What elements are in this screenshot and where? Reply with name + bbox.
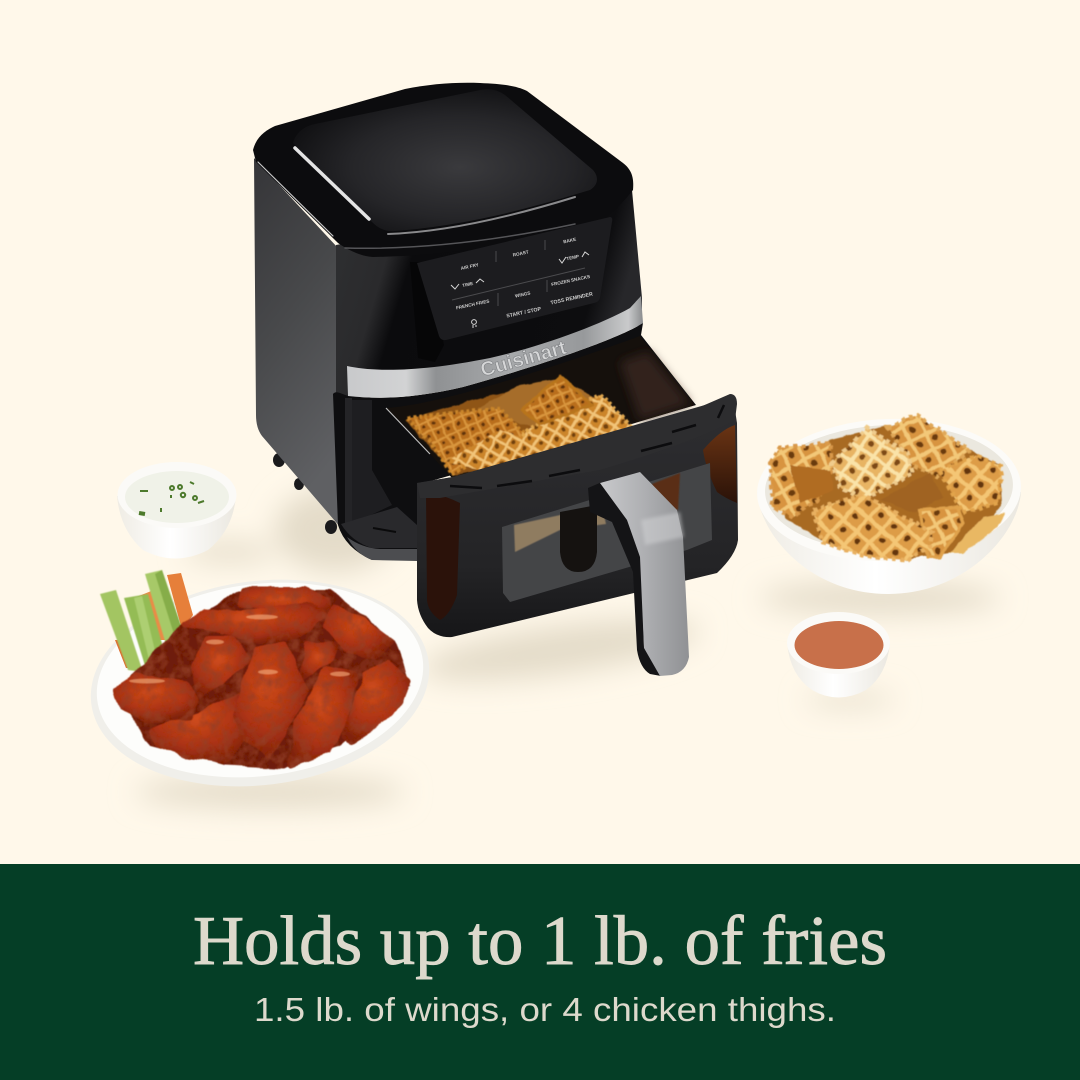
handle dark back	[588, 482, 661, 676]
compartment interior reflection	[352, 400, 392, 524]
bottom banner	[0, 864, 1080, 1080]
rim slots	[450, 405, 724, 488]
wing glaze highlights	[129, 614, 350, 684]
basket back reflection	[620, 352, 690, 420]
panel labels: FRENCH FRIES	[456, 299, 490, 311]
sauce cup	[787, 612, 890, 698]
waffle fries	[770, 415, 1005, 560]
wing mass base	[115, 590, 410, 768]
drawer rim	[417, 394, 737, 498]
reflected fries near handle	[652, 473, 680, 510]
celery sticks	[100, 570, 190, 678]
drawer left tinted window	[426, 492, 460, 620]
handle silver front	[600, 472, 689, 676]
control panel	[417, 217, 612, 340]
basket interior	[386, 336, 695, 478]
chives	[139, 482, 204, 514]
heading: Holds up to 1 lb. of fries	[193, 903, 887, 980]
sauce	[794, 621, 884, 669]
fries bowl	[755, 414, 1023, 594]
front face dark glare	[410, 262, 444, 362]
fries seen through window	[514, 506, 606, 552]
ranch	[125, 471, 229, 523]
drawer front	[417, 397, 738, 637]
fries base	[772, 425, 1002, 560]
cup rim	[787, 612, 890, 674]
fryer left side panel	[254, 158, 341, 528]
wings	[115, 590, 410, 768]
drawer front window	[502, 463, 712, 602]
panel labels: BAKE	[563, 237, 577, 244]
panel labels: WINGS	[515, 290, 531, 299]
panel labels: FROZEN SNACKS	[551, 274, 591, 287]
panel labels	[456, 237, 594, 320]
cup rim	[118, 462, 236, 528]
panel labels: TIME	[462, 281, 474, 288]
subheading: 1.5 lb. of wings, or 4 chicken thighs.	[254, 991, 836, 1028]
air fryer	[253, 83, 738, 676]
brand logo: Cuisinart	[478, 337, 569, 382]
cup body	[117, 496, 236, 558]
plate	[79, 561, 441, 805]
panel labels: AIR FRY	[460, 262, 479, 271]
fryer feet	[273, 453, 337, 534]
ranch dip cup	[117, 462, 236, 558]
fryer top	[253, 83, 633, 257]
panel labels: TEMP	[566, 254, 579, 261]
basket left edge highlight	[386, 408, 430, 454]
window slot	[560, 505, 597, 572]
bowl rim	[755, 414, 1023, 566]
carrot sticks	[115, 573, 193, 668]
panel labels: TOSS REMINDER	[550, 292, 594, 306]
lid glossy panel	[293, 89, 597, 231]
panel labels: ROAST	[512, 249, 529, 258]
compartment opening	[333, 323, 696, 560]
ground shadows	[135, 488, 1000, 808]
handle	[588, 472, 689, 676]
basket fries	[405, 376, 634, 475]
panel labels: START / STOP	[506, 306, 542, 320]
drawer base plate	[341, 507, 417, 548]
compartment left wall	[345, 398, 352, 526]
panel chevrons and bulb icon	[451, 252, 589, 328]
wings plate	[79, 561, 441, 805]
fryer front face	[336, 190, 642, 400]
bowl body	[757, 492, 1021, 594]
cup body	[787, 643, 890, 698]
base lower rim	[347, 537, 417, 561]
background	[0, 0, 1080, 864]
silver band	[347, 296, 643, 398]
drawer right tinted window	[703, 425, 737, 503]
slot in base	[373, 528, 396, 532]
lid highlights	[258, 148, 575, 248]
